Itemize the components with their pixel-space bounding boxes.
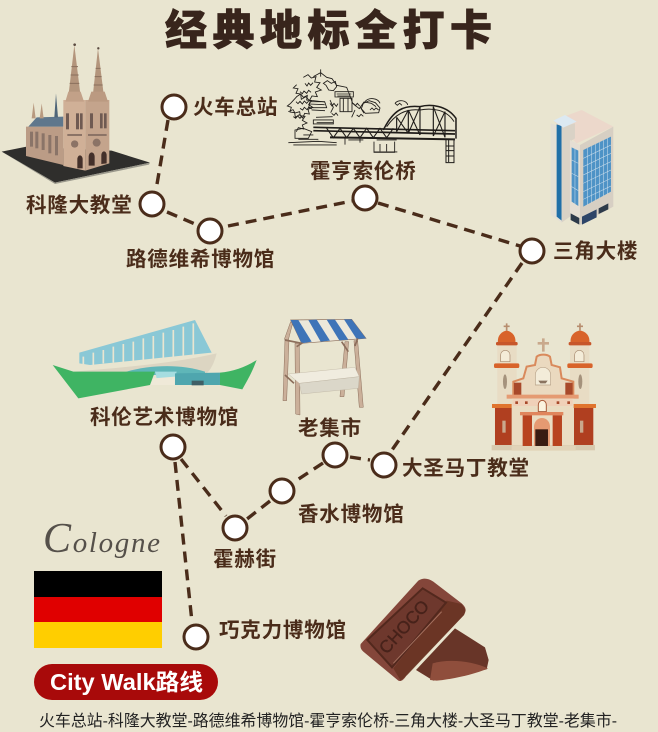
badge: City Walk route — [34, 664, 218, 700]
label: 香水博物馆: 香水博物馆 — [298, 503, 404, 526]
label: 三角大楼: 三角大楼 — [553, 239, 638, 263]
label: 科隆大教堂: 科隆大教堂 — [26, 194, 132, 217]
title: 经典地标全打卡 — [165, 7, 498, 54]
label: 路德维希博物馆: 路德维希博物馆 — [126, 248, 275, 271]
icon: chocolate bar: CHOCO — [375, 596, 433, 658]
icon: chocolate bar — [360, 579, 489, 681]
German flag — [34, 571, 162, 648]
icon: Triangle office tower — [551, 110, 613, 225]
icon: market stall — [283, 319, 366, 415]
label: 霍赫街: 霍赫街 — [213, 548, 277, 571]
label: 老集市: 老集市 — [298, 416, 362, 440]
route stops — [140, 95, 544, 649]
label: 火车总站: 火车总站 — [193, 95, 278, 119]
icon: art museum — [53, 320, 257, 398]
label: 大圣马丁教堂: 大圣马丁教堂 — [402, 457, 530, 480]
label: 巧克力博物馆: 巧克力博物馆 — [219, 619, 347, 642]
icon: Hohenzollern Bridge sketch — [287, 69, 456, 163]
badge: City Walk route: City Walk路线 — [50, 669, 203, 695]
icon: St. Martin church — [492, 323, 596, 451]
Cologne script heading: Cologne — [43, 516, 160, 562]
icon: Cologne Cathedral — [2, 43, 150, 184]
route: dashed path — [156, 120, 522, 622]
label: 霍亨索伦桥: 霍亨索伦桥 — [310, 159, 416, 183]
route description text: 火车总站-科隆大教堂-路德维希博物馆-霍亨索伦桥-三角大楼-大圣马丁教堂-老集市- — [39, 712, 617, 730]
label: 科伦艺术博物馆: 科伦艺术博物馆 — [90, 406, 239, 429]
